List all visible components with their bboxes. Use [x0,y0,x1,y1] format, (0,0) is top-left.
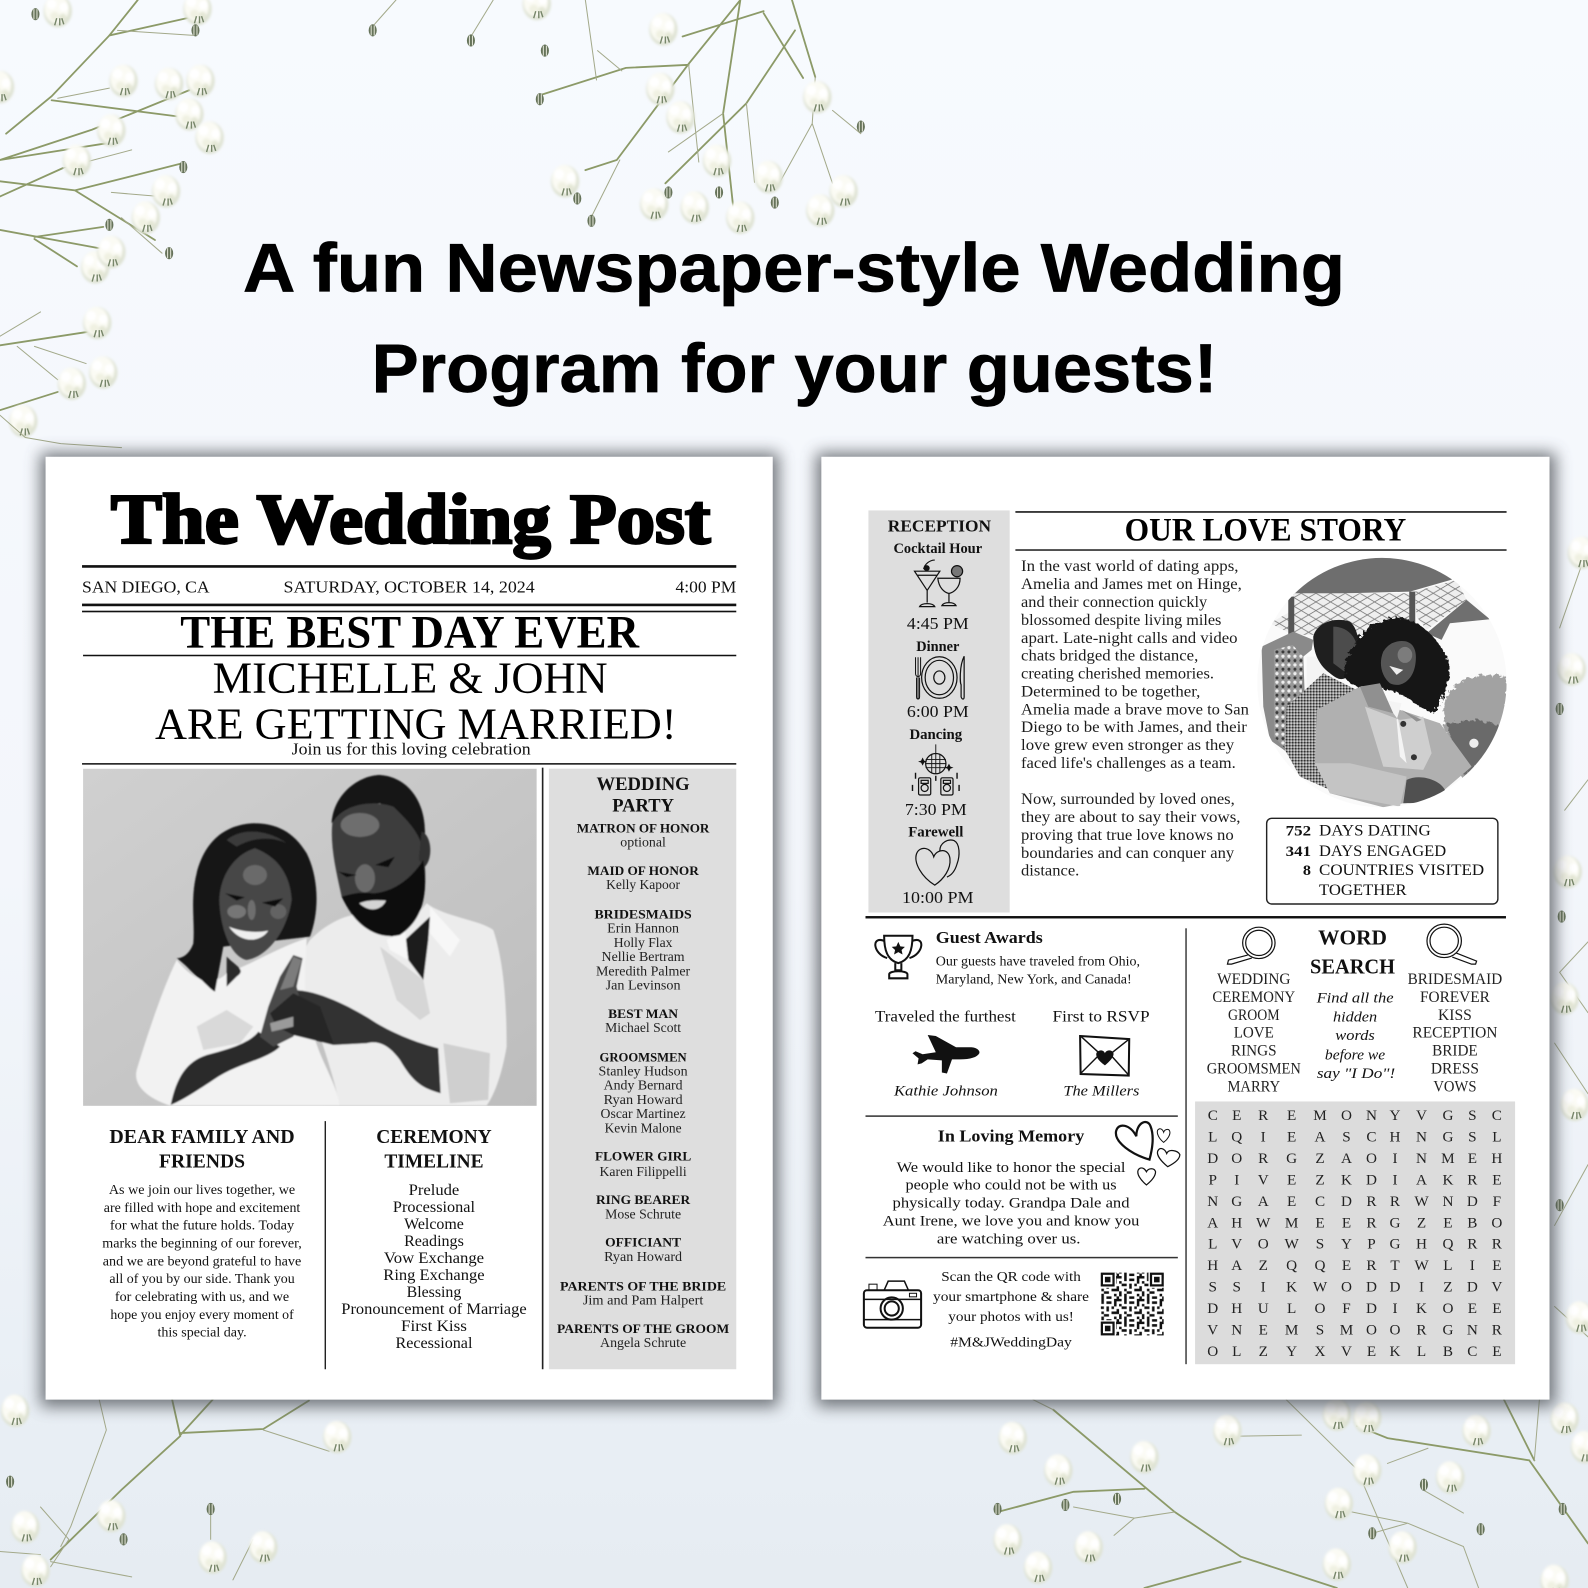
text block: love story: apart. Late-night calls and video [1021,630,1238,647]
letter: dear family and friends: FRIENDS [159,1151,245,1173]
stats box: 752 [1286,823,1311,840]
panel: back page of newspaper program [821,457,1550,1400]
memorial text: physically today. Grandpa Dale and [893,1195,1130,1212]
text block: love story: Diego to be with James, and their [1021,719,1248,736]
word list right: DRESS [1431,1061,1479,1078]
stats box: 341 [1286,843,1311,860]
letter: dear family and friends: all of you by our side. Thank you [109,1271,295,1286]
word search heading [1310,925,1396,979]
word list right: FOREVER [1420,989,1490,1006]
wedding party list [557,821,729,1350]
man's shirt [300,903,507,1106]
forearms and hands [171,1032,280,1105]
letter: dear family and friends: this special day. [157,1325,247,1340]
stats box: DAYS DATING [1319,823,1431,840]
word list left: RINGS [1231,1043,1277,1060]
wedding party list: Kelly Kapoor [606,877,681,892]
text block: love story: Now, surrounded by loved ones, [1021,791,1235,808]
text block: love story: Amelia and James met on Hinge, [1021,576,1242,593]
letter: dear family and friends: for what the future holds. Today [110,1218,295,1233]
wedding party heading: PARTY [612,796,674,817]
couple announcement [155,653,677,748]
man's head [332,775,425,867]
QR code instructions [933,1269,1089,1324]
word search grid: PIVEZKDIAKRE [1209,1171,1501,1188]
wedding party list: Erin Hannon [607,921,680,936]
award: first to RSVP: First to RSVP [1053,1009,1150,1026]
ceremony timeline: First Kiss [401,1318,467,1335]
farewell label: Farewell [908,825,963,841]
wedding party list: RING BEARER [596,1193,691,1207]
word list left: WEDDING [1217,971,1291,988]
couple announcement: ARE GETTING MARRIED! [155,698,677,748]
panel: photo sharing [864,1269,1164,1350]
icon: magnifying glass left [1227,927,1275,964]
decoration: baby's breath top-centre [369,0,865,234]
icon: magnifying glass right [1427,924,1477,964]
word list right [1408,971,1502,1095]
panel: wedding party [549,769,736,1369]
decoration: baby's breath right edge [1551,537,1588,1435]
letter: dear family and friends: As we join our lives together, we [109,1182,295,1197]
time: 10:00 PM: 10:00 PM [902,888,974,907]
text block: love story [1021,558,1249,880]
invitation line: Join us for this loving celebration [292,740,531,759]
ceremony timeline: Processional [393,1199,476,1216]
icon: envelope with heart [1080,1036,1129,1076]
text block: love story: blossomed despite living miles [1021,612,1221,629]
wedding party list: GROOMSMEN [600,1050,687,1064]
ceremony timeline: Recessional [395,1335,473,1352]
QR code instructions: Scan the QR code with [941,1269,1081,1284]
stats box [1267,818,1498,904]
icon: trophy [875,936,921,978]
word list right: VOWS [1433,1078,1476,1095]
text block: love story: Amelia made a brave move to San [1021,701,1249,718]
ceremony timeline: Prelude [409,1182,459,1199]
ceremony timeline: TIMELINE [384,1151,484,1173]
word search grid: HAZQQERTWLIE [1207,1257,1501,1274]
main heading: Program for your guests! [372,330,1217,407]
wedding party list: Holly Flax [614,935,673,950]
icon: cocktails [915,560,963,607]
word search grid: VNEMSMOORGNR [1207,1321,1503,1338]
stats box: 8 [1303,862,1311,879]
text block: love story: creating cherished memories. [1021,666,1214,683]
word list right: BRIDE [1432,1043,1478,1060]
word search grid: OLZYXVEKLBCE [1207,1343,1501,1360]
text block: love story: Determined to be together, [1021,683,1200,700]
text block: love story: distance. [1021,863,1079,880]
wedding party list: MATRON OF HONOR [577,821,710,835]
heading: our love story: OUR LOVE STORY [1125,513,1406,549]
dateline: SATURDAY, OCTOBER 14, 2024 [284,577,535,596]
text block: love story: proving that true love knows no [1021,827,1234,844]
word search grid: NGAECDRRWNDF [1207,1193,1501,1210]
word list left: LOVE [1234,1025,1274,1042]
ceremony timeline: Readings [404,1233,464,1250]
word list left: GROOMSMEN [1207,1061,1301,1078]
woman's shirt [136,938,340,1106]
decoration: baby's breath bottom-left [0,1395,351,1587]
word search grid [1195,1101,1515,1364]
instructions: words [1335,1027,1375,1044]
letter: dear family and friends: DEAR FAMILY AND [109,1126,295,1148]
text block: love story: faced life's challenges as a team. [1021,755,1236,772]
word search heading: WORD [1318,925,1387,949]
text block: love story: In the vast world of dating apps, [1021,558,1238,575]
word list left: MARRY [1227,1078,1280,1095]
instructions: say "I Do"! [1317,1065,1395,1082]
instructions: Find all the [1315,990,1394,1007]
instructions: before we [1325,1046,1385,1063]
wedding party list: Meredith Palmer [596,963,691,978]
word search grid: LQIEASCHNGSL [1208,1128,1501,1145]
stats box: TOGETHER [1319,882,1407,899]
guest origins text: Maryland, New York, and Canada! [936,971,1132,986]
decoration: baby's breath bottom-right [994,1399,1588,1588]
award winner: Kathie Johnson: Kathie Johnson [893,1083,998,1100]
memorial text: are watching over us. [937,1230,1080,1247]
decoration: baby's breath top-left [0,0,224,448]
wedding party heading [597,774,690,817]
ceremony timeline: Vow Exchange [384,1250,484,1267]
wedding party list: optional [620,835,666,850]
icon: airplane [912,1035,979,1074]
word search grid: CEREMONYVGSC [1208,1107,1502,1124]
in loving memory heading: In Loving Memory [938,1126,1085,1145]
letter: dear family and friends: are filled with hope and excitement [104,1200,301,1215]
page shadows [41,453,1556,1407]
icon: disco ball and speakers [912,744,959,795]
wedding party list: FLOWER GIRL [595,1150,691,1164]
photo: couple at gazebo in circle [1250,550,1517,817]
ceremony timeline: Blessing [407,1284,461,1301]
photo: couple in white shirts [83,769,537,1106]
stats box: COUNTRIES VISITED [1319,862,1484,879]
panel: word search [1195,924,1515,1364]
guest origins text: Our guests have traveled from Ohio, [936,954,1140,969]
wedding party list: PARENTS OF THE BRIDE [560,1279,726,1293]
word list right: RECEPTION [1412,1025,1497,1042]
icon: plate and cutlery [916,656,964,699]
panel: reception schedule [868,510,1010,912]
wedding party list: Ryan Howard [604,1092,683,1107]
memorial text: people who could not be with us [905,1177,1117,1194]
memorial text: Aunt Irene, we love you and know you [883,1212,1140,1229]
wedding party list: OFFICIANT [605,1236,682,1250]
letter: dear family and friends: hope you enjoy every moment of [110,1307,294,1322]
dateline: 4:00 PM [676,577,736,596]
wedding party list: BEST MAN [608,1007,678,1021]
hashtag: #M&JWeddingDay [950,1335,1072,1350]
dinner label: Dinner [916,639,960,655]
dateline [82,577,736,596]
cocktail hour label: Cocktail Hour [894,541,983,557]
text block: love story: they are about to say their vows, [1021,809,1241,826]
icon: hearts [1116,1122,1180,1185]
icon: camera [864,1281,922,1328]
stats box: DAYS ENGAGED [1319,843,1446,860]
letter: dear family and friends [102,1126,302,1340]
wedding party list: MAID OF HONOR [587,864,700,878]
word search grid: SSIKWODDIZDV [1209,1279,1502,1296]
wedding party list: Michael Scott [605,1020,681,1035]
dateline: SAN DIEGO, CA [82,577,210,596]
ceremony timeline: Ring Exchange [383,1267,485,1284]
time: 4:45 PM: 4:45 PM [907,614,969,633]
icon: two hearts [916,840,959,885]
guest origins text [936,954,1140,986]
main heading: A fun Newspaper-style Wedding [243,230,1345,307]
headline: THE BEST DAY EVER [180,607,640,659]
wedding party list: Nellie Bertram [602,949,685,964]
masthead rules [82,565,736,612]
wedding party list: Andy Bernard [604,1078,683,1093]
memorial text [883,1159,1140,1247]
word list left: GROOM [1228,1007,1280,1024]
dancing label: Dancing [909,727,963,743]
masthead title: The Wedding Post [111,481,711,559]
time: 6:00 PM: 6:00 PM [907,702,969,721]
wedding party list: BRIDESMAIDS [594,908,692,922]
time: 7:30 PM: 7:30 PM [905,800,967,819]
word list left [1207,971,1301,1095]
woman's hair [177,823,317,992]
panel: in loving memory [883,1122,1180,1247]
ceremony timeline: Pronouncement of Marriage [341,1301,527,1318]
text block: love story: and their connection quickly [1021,594,1207,611]
wedding party list: Jim and Pam Halpert [583,1292,704,1307]
main heading [243,230,1345,407]
text block: love story: chats bridged the distance, [1021,648,1198,665]
wedding party list: Ryan Howard [604,1249,683,1264]
word search grid: LVOWSYPGHQRR [1208,1236,1503,1253]
wedding party list: Karen Filippelli [600,1164,687,1179]
word search grid: DORGZAOINMEH [1207,1150,1502,1167]
text block: love story: boundaries and can conquer any [1021,845,1234,862]
wedding party list: PARENTS OF THE GROOM [557,1322,729,1336]
word list right: BRIDESMAID [1408,971,1502,988]
QR code instructions: your smartphone & share [933,1289,1089,1304]
word list right: KISS [1438,1007,1472,1024]
wedding party list: Kevin Malone [605,1120,682,1135]
wedding party list: Angela Schrute [600,1335,686,1350]
award: traveled the furthest: Traveled the furthest [875,1009,1016,1026]
ceremony timeline: CEREMONY [376,1126,492,1148]
word search grid: AHWMEERGZEBO [1207,1214,1502,1231]
letter: dear family and friends: for celebrating with us, and we [115,1289,289,1304]
wedding party list: Stanley Hudson [599,1064,688,1079]
QR code [1101,1273,1164,1335]
wedding party list: Mose Schrute [605,1206,681,1221]
reception heading: RECEPTION [888,516,992,535]
wedding party list: Oscar Martinez [601,1106,686,1121]
letter: dear family and friends: marks the beginning of our forever, [102,1236,302,1251]
award winner: The Millers: The Millers [1063,1083,1139,1100]
couple announcement: MICHELLE & JOHN [213,653,608,703]
memorial text: We would like to honor the special [897,1159,1125,1176]
guest awards heading: Guest Awards [936,928,1043,947]
woman's face [219,848,292,960]
wedding party heading: WEDDING [597,774,690,795]
instructions: hidden [1333,1009,1377,1026]
letter: dear family and friends: and we are beyond grateful to have [103,1253,301,1268]
panel: guest awards [875,928,1150,1100]
word list left: CEREMONY [1212,989,1295,1006]
text block: love story: love grew even stronger as they [1021,737,1234,754]
panel: front page of newspaper program [46,457,773,1400]
ceremony timeline: Welcome [404,1216,464,1233]
wedding party list: Jan Levinson [606,977,681,992]
instructions [1315,990,1395,1082]
QR code instructions: your photos with us! [948,1309,1074,1324]
word search grid: DHULOFDIKOEE [1207,1300,1501,1317]
word search heading: SEARCH [1310,955,1396,979]
ceremony timeline [341,1126,527,1352]
